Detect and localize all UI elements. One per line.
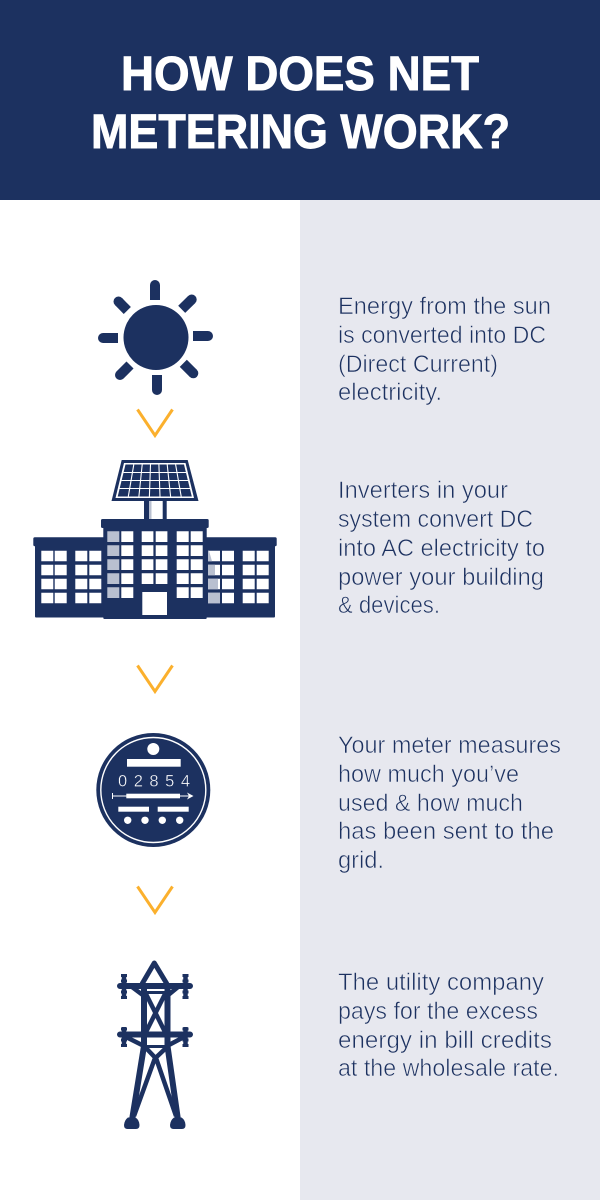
shaded windows bbox=[107, 531, 220, 603]
door bbox=[142, 592, 167, 615]
text block: step 4 bbox=[338, 969, 559, 1082]
text block: step 4: pays for the excess bbox=[338, 998, 538, 1025]
arrow: meter to tower bbox=[138, 886, 172, 912]
text block: step 1: is converted into DC bbox=[338, 322, 546, 349]
arrow: sun to building bbox=[138, 410, 172, 436]
text block: step 4: The utility company bbox=[338, 969, 544, 996]
icon: solar-powered building bbox=[33, 460, 277, 619]
windows bbox=[41, 531, 269, 603]
text block: step 3: grid. bbox=[338, 847, 384, 874]
text block: step 1: (Direct Current) bbox=[338, 351, 498, 378]
text block: step 3: how much you’ve bbox=[338, 761, 519, 788]
text block: step 4: energy in bill credits bbox=[338, 1027, 552, 1054]
text block: step 3: Your meter measures bbox=[338, 732, 561, 759]
title: HOW DOES NET bbox=[121, 48, 479, 101]
central block and wings bbox=[33, 519, 277, 619]
text block: step 2: system convert DC bbox=[338, 506, 533, 533]
text block: step 1: Energy from the sun bbox=[338, 293, 551, 320]
text block: step 1 bbox=[338, 293, 551, 406]
solar panel bbox=[112, 460, 198, 501]
meter reading: 02854 bbox=[118, 773, 190, 791]
title: METERING WORK? bbox=[91, 106, 510, 159]
text block: step 3 bbox=[338, 732, 561, 874]
text block: step 4: at the wholesale rate. bbox=[338, 1055, 559, 1082]
header band bbox=[0, 0, 600, 200]
title bbox=[91, 48, 510, 159]
icon: sun bbox=[103, 285, 208, 390]
icon: electric meter bbox=[96, 733, 210, 847]
panel mount bbox=[144, 500, 167, 520]
text block: step 1: electricity. bbox=[338, 379, 442, 406]
meter arrow bbox=[112, 792, 194, 800]
text block: step 3: used & how much bbox=[338, 790, 523, 817]
text block: step 2: into AC electricity to bbox=[338, 535, 545, 562]
arrow: building to meter bbox=[138, 666, 172, 692]
text block: step 2: power your building bbox=[338, 564, 544, 591]
panel: right column background bbox=[300, 200, 600, 1200]
text block: step 2: & devices. bbox=[338, 592, 440, 619]
icon: transmission tower bbox=[120, 963, 190, 1129]
text block: step 3: has been sent to the bbox=[338, 818, 554, 845]
text block: step 2 bbox=[338, 477, 545, 619]
text block: step 2: Inverters in your bbox=[338, 477, 508, 504]
